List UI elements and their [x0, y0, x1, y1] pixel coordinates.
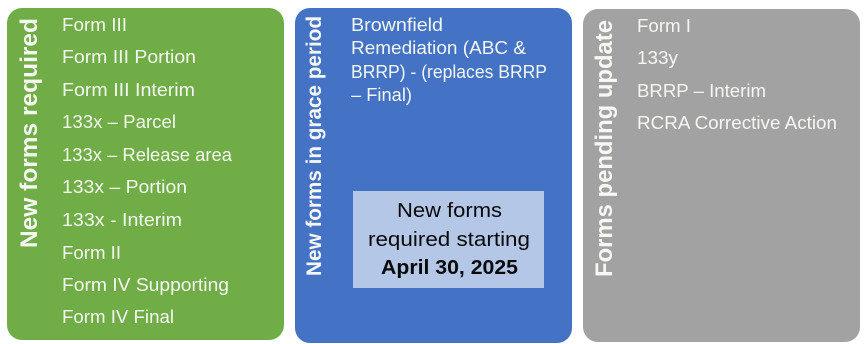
heading: new forms required: New forms required — [16, 18, 43, 248]
heading: forms pending update: Forms pending update — [591, 20, 618, 277]
list: required forms: Form III — [62, 15, 127, 35]
list: required forms: Form III Interim — [62, 80, 195, 100]
callout: required start date: April 30, 2025 — [381, 257, 518, 279]
list: required forms: 133x – Portion — [62, 177, 187, 197]
list: required forms — [62, 15, 233, 327]
callout: required start date — [353, 191, 544, 288]
list: pending forms: BRRP – Interim — [637, 81, 766, 101]
panel: new forms required — [7, 8, 284, 340]
list: required forms: 133x – Parcel — [62, 112, 176, 132]
text block: brownfield remediation: Brownfield — [351, 15, 443, 35]
list: required forms: 133x – Release area — [62, 145, 233, 165]
panel: forms pending update — [583, 9, 860, 342]
list: pending forms: RCRA Corrective Action — [637, 113, 837, 133]
list: required forms: Form III Portion — [62, 47, 196, 67]
callout: required start date: required starting — [368, 229, 530, 251]
panel: new forms in grace period — [295, 8, 572, 343]
text block: brownfield remediation: – Final) — [351, 85, 412, 105]
list: pending forms — [637, 16, 837, 133]
list: required forms: Form II — [62, 243, 121, 263]
list: required forms: 133x - Interim — [62, 210, 182, 230]
heading: new forms in grace period: New forms in grace period — [302, 16, 326, 276]
callout: required start date: New forms — [397, 200, 502, 222]
text block: brownfield remediation: Remediation (ABC & — [351, 38, 526, 58]
text block: brownfield remediation — [351, 15, 547, 105]
list: required forms: Form IV Supporting — [62, 275, 229, 295]
list: required forms: Form IV Final — [62, 307, 174, 327]
list: pending forms: 133y — [637, 48, 678, 68]
text block: brownfield remediation: BRRP) - (replaces BRRP — [351, 62, 547, 82]
list: pending forms: Form I — [637, 16, 691, 36]
